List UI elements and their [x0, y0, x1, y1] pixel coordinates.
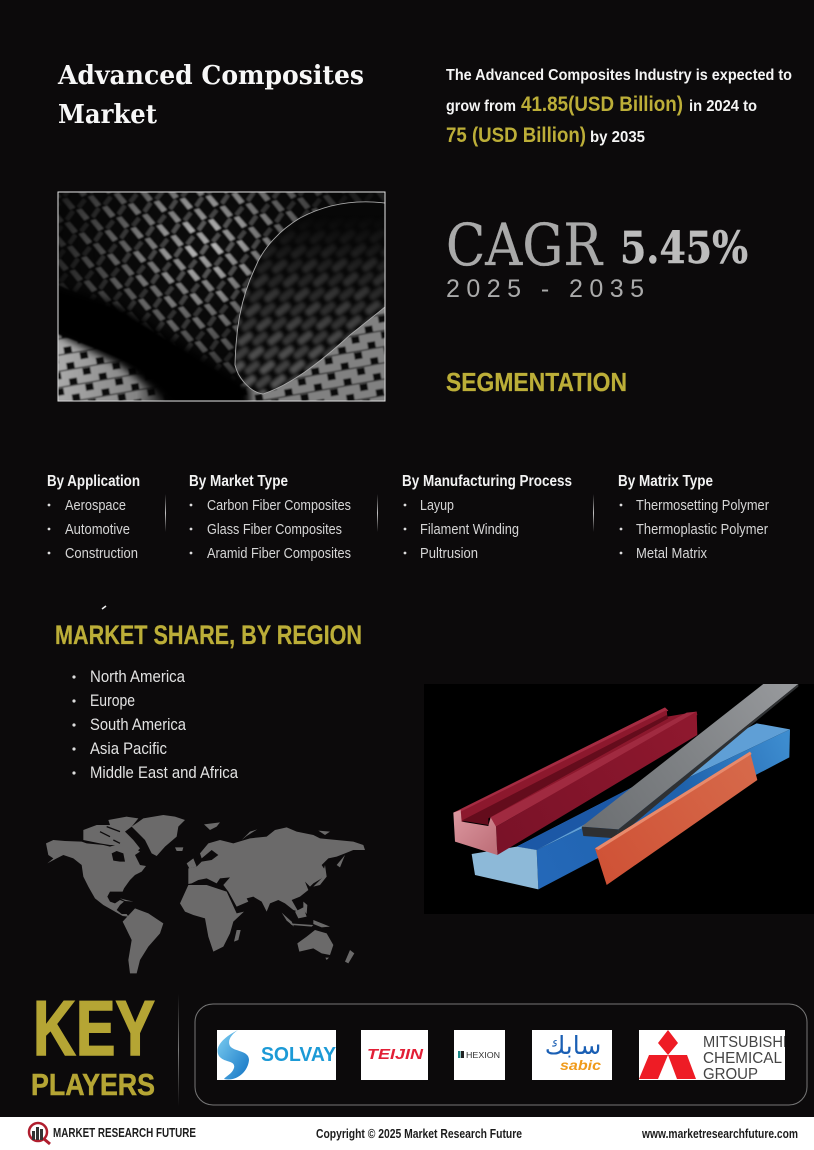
logo: sabic: سابك	[545, 1031, 601, 1060]
segment column: by manufacturing process: By Manufacturing Process	[402, 473, 572, 490]
panel: key player logos	[195, 1004, 807, 1105]
region list: Asia Pacific	[90, 740, 167, 758]
segment column: by manufacturing process: Filament Winding	[420, 522, 519, 538]
logo: hexion: HEXION	[466, 1051, 500, 1060]
title: Market	[58, 100, 157, 130]
logo: mitsubishi chemical group	[639, 1030, 787, 1083]
segment column: by market type: By Market Type	[189, 473, 288, 490]
region list: Middle East and Africa	[90, 764, 239, 782]
segment column: by application: Aerospace	[65, 498, 126, 514]
world map	[46, 815, 365, 973]
segment column: by application	[47, 473, 140, 562]
segment column: by matrix type: Metal Matrix	[636, 546, 708, 562]
segment column: by application: Automotive	[65, 522, 130, 538]
image: carbon fiber weave	[58, 192, 386, 402]
title: Advanced Composites	[57, 61, 364, 91]
logo: teijin	[361, 1030, 428, 1080]
segment column: by application: By Application	[47, 473, 140, 490]
logo: hexion	[454, 1030, 505, 1080]
segment column: by manufacturing process: Layup	[420, 498, 454, 514]
image: composite profile bars	[424, 684, 814, 914]
heading: segmentation: SEGMENTATION	[446, 367, 627, 397]
logo: sabic	[532, 1030, 612, 1080]
region list: South America	[90, 716, 187, 734]
heading: key players	[31, 984, 155, 1102]
CAGR figure	[446, 211, 748, 303]
market forecast text: in 2024 to	[689, 98, 757, 115]
market forecast text	[446, 67, 792, 147]
segment column: by manufacturing process	[402, 473, 572, 562]
market forecast text: by 2035	[590, 129, 645, 146]
heading: key players: PLAYERS	[31, 1067, 155, 1102]
segment column: by matrix type: Thermosetting Polymer	[636, 498, 769, 514]
CAGR figure: CAGR	[446, 211, 604, 279]
footer bar: MARKET RESEARCH FUTURE	[53, 1126, 196, 1140]
segment column: by market type: Carbon Fiber Composites	[207, 498, 351, 514]
segment column: by manufacturing process: Pultrusion	[420, 546, 478, 562]
logo: mitsubishi chemical group: CHEMICAL	[703, 1050, 782, 1067]
segment column: by matrix type: Thermoplastic Polymer	[636, 522, 768, 538]
market forecast text: 41.85(USD Billion)	[521, 93, 683, 116]
heading: market share by region: MARKET SHARE, BY REGION	[55, 620, 362, 650]
title	[57, 61, 364, 130]
region list	[72, 668, 239, 782]
logo: mitsubishi chemical group: MITSUBISHI	[703, 1034, 787, 1051]
icon: market research future logo	[29, 1123, 50, 1144]
segment column: by matrix type	[618, 473, 769, 562]
segment column: by market type: Glass Fiber Composites	[207, 522, 342, 538]
segment column: by matrix type: By Matrix Type	[618, 473, 713, 490]
heading: key players: KEY	[33, 984, 155, 1072]
footer bar	[0, 1117, 814, 1150]
logo: sabic: sabic	[560, 1057, 601, 1073]
market forecast text: The Advanced Composites Industry is expected to	[446, 67, 792, 84]
segment column: by market type: Aramid Fiber Composites	[207, 546, 351, 562]
logo: solvay: SOLVAY	[261, 1044, 337, 1066]
market forecast text: 75 (USD Billion)	[446, 124, 586, 147]
segment column: by application: Construction	[65, 546, 138, 562]
logo: teijin: TEIJIN	[367, 1046, 424, 1063]
region list: Europe	[90, 692, 135, 710]
market forecast text: grow from	[446, 98, 516, 115]
logo: solvay	[217, 1030, 337, 1080]
footer bar: Copyright © 2025 Market Research Future	[316, 1127, 522, 1141]
segment column: by market type	[189, 473, 351, 562]
logo: mitsubishi chemical group: GROUP	[703, 1066, 758, 1083]
CAGR figure: 2025 - 2035	[446, 275, 644, 303]
region list: North America	[90, 668, 186, 686]
CAGR figure: 5.45%	[620, 223, 748, 274]
